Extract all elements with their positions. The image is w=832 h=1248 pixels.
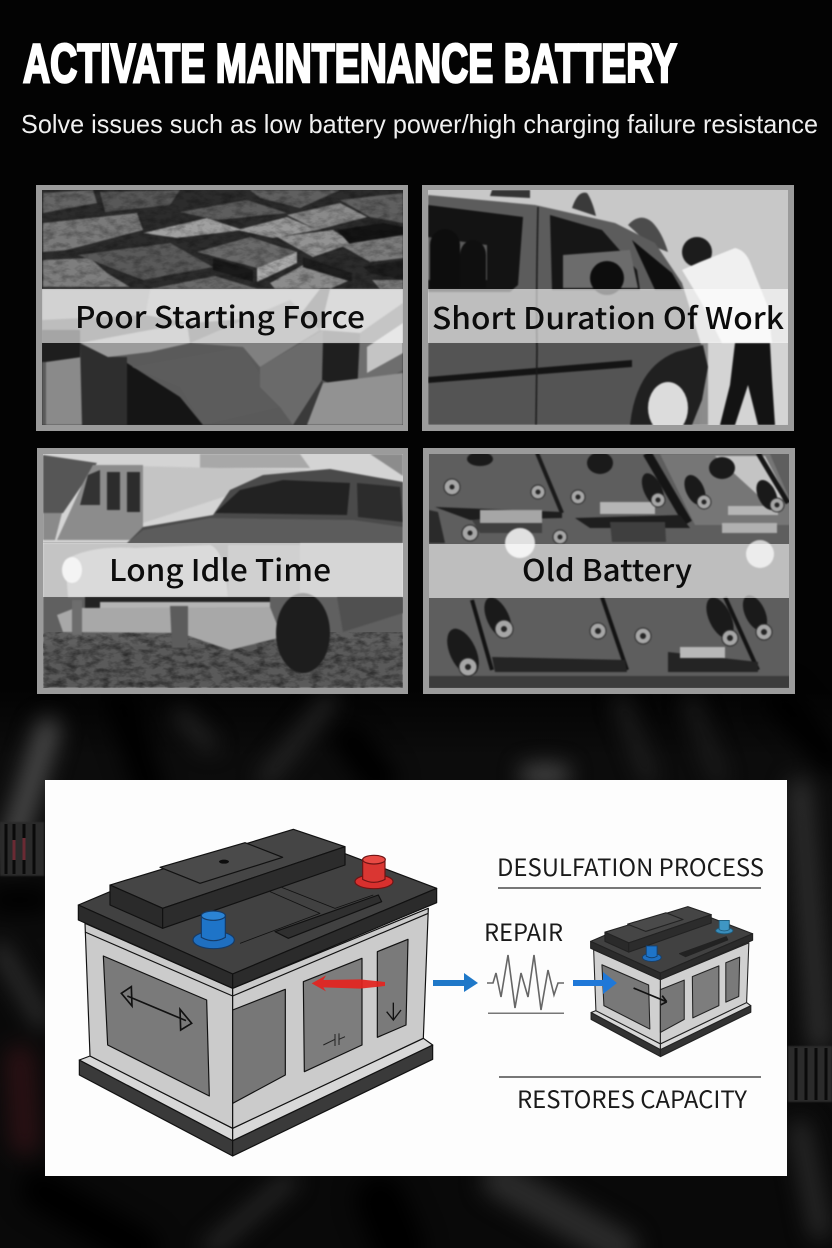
panel: old battery	[423, 448, 795, 694]
panel: desulfation diagram	[45, 780, 787, 1176]
icon: down arrow	[387, 1003, 401, 1020]
label: Old Battery	[522, 546, 692, 590]
label: restores capacity: RESTORES CAPACITY	[517, 1080, 747, 1115]
icon: small repaired battery	[591, 907, 753, 1057]
icon: large battery	[78, 829, 437, 1156]
decorative clips on the cables	[0, 822, 44, 876]
label: Poor Starting Force	[75, 293, 365, 337]
label: Short Duration Of Work	[432, 294, 784, 338]
panel: short duration of work	[422, 185, 794, 434]
panel: long idle time	[37, 448, 408, 694]
arrow: blue to repair	[433, 973, 478, 992]
arrow: blue into small battery	[573, 972, 617, 994]
panel: poor starting force	[36, 185, 408, 431]
icon: blue terminal	[193, 911, 234, 949]
decorative rule	[499, 1076, 761, 1078]
label: repair: REPAIR	[484, 913, 563, 948]
label: Long Idle Time	[109, 546, 331, 590]
icon: red terminal	[355, 855, 393, 889]
band	[428, 289, 788, 343]
band	[43, 543, 403, 597]
heading: desulfation process: DESULFATION PROCESS	[497, 848, 764, 883]
arrow: double-headed black	[121, 987, 192, 1030]
subtitle: Solve issues such as low battery power/high charging failure resistance	[21, 109, 818, 139]
band	[42, 289, 403, 343]
arrow: red	[312, 975, 385, 991]
band	[429, 544, 789, 598]
icon: repair waveform	[487, 955, 564, 1010]
icon: capacitor mark	[323, 1033, 345, 1046]
